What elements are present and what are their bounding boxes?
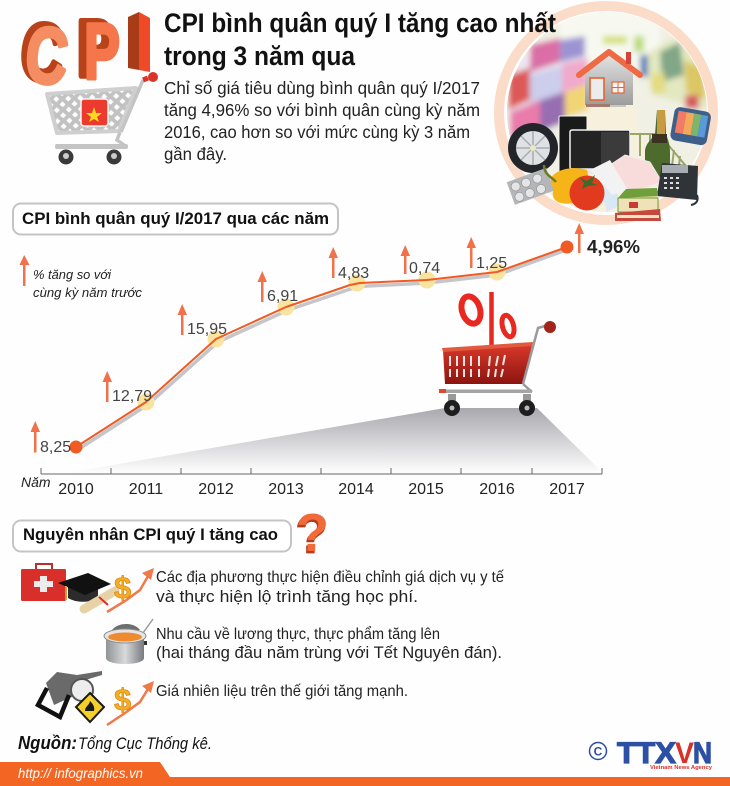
arrow: legend [20,255,30,286]
intro text [164,78,480,164]
wordmark [617,737,712,770]
line chart [70,240,574,454]
data labels: 0,74 [409,260,440,277]
data markers [138,264,506,410]
wordmark: N [693,737,712,770]
icon: graduation cap [58,573,111,602]
start point [70,440,82,454]
footer bar [0,762,730,786]
logo: CPI 3D letters [17,4,150,102]
legend text: cùng kỳ năm trước [33,285,142,300]
year labels: 2015 [408,481,444,498]
cause text [156,569,504,606]
tagline: Vietnam News Agency [650,765,713,771]
icon: champagne bottle [645,110,670,178]
icon: yellow pepper [551,168,588,204]
cause text [156,625,502,662]
wordmark: TTX [617,737,676,770]
intro text: gần đây. [164,144,227,164]
footer bar: http:// infographics.vn [18,765,143,781]
year labels: 2017 [549,481,585,498]
icon: books [615,188,661,221]
cause 1 [21,564,504,612]
title: CPI bình quân quý I tăng cao nhất [164,8,556,38]
letter P: P [77,4,113,93]
source: Tổng Cục Thống kê. [78,734,212,753]
basket [443,345,532,384]
heading: chart [13,204,338,234]
label: 2017 value: 4,96% [587,237,640,257]
year labels: 2013 [268,481,304,498]
letter I: I [139,69,140,71]
data line [76,247,567,447]
icon: dollar: $ [114,570,131,605]
title [164,8,556,71]
icon: fuel nozzle [38,671,102,717]
year labels: 2016 [479,481,515,498]
icon: shirts [590,155,662,212]
heading: causes: Nguyên nhân CPI quý I tăng cao [23,525,278,544]
logo: TTXVN [590,737,713,771]
icon: question mark: ? [295,505,328,565]
icon: monitor [570,130,630,174]
cause text: (hai tháng đầu năm trùng với Tết Nguyên đán). [156,644,502,662]
cause text: và thực hiện lộ trình tăng học phí. [156,588,418,606]
icon: telephone [657,163,698,205]
icon: tomato [544,165,604,210]
photo ring [499,6,713,220]
intro text: tăng 4,96% so với bình quân cùng kỳ năm [164,100,480,120]
icon: diploma [84,591,115,609]
wheels [444,394,535,416]
icon: cart handle behind goods [630,134,686,166]
letter C: C [21,9,72,102]
icon: computer tower [559,116,587,176]
icon: growth arrow [107,568,154,612]
cause text: Nhu cầu về lương thực, thực phẩm tăng lên [156,625,440,643]
icon: shopping illustration circle [499,5,715,221]
increase arrows [30,223,584,452]
area: grey shadow under chart [60,408,602,474]
data labels: 15,95 [187,321,227,338]
data labels [40,255,507,456]
data labels: 1,25 [476,255,507,272]
icon: hazard sign [76,693,104,722]
cause 3 [38,671,408,725]
icon: gauge [71,679,93,701]
source: Nguồn: [18,733,77,753]
icon: first aid kit [21,564,66,601]
heading: chart: CPI bình quân quý I/2017 qua các năm [22,209,329,228]
icon: cooking pot [104,619,153,664]
icon: silver shopping cart with flag [47,72,158,164]
year axis [21,468,602,498]
cause 2 [104,619,502,664]
heading: causes [13,520,291,552]
cause text: Giá nhiên liệu trên thế giới tăng mạnh. [156,683,408,700]
letter C: C [17,6,68,99]
letter P: P [84,7,120,96]
data labels: 4,83 [338,265,369,282]
icon: tire [508,123,558,173]
year labels: 2012 [198,481,234,498]
icon: blister pills [507,168,554,205]
source [18,733,212,753]
data labels: 8,25 [40,439,71,456]
icon: red cart with percent sign [439,292,556,416]
year labels: 2014 [338,481,374,498]
end point [560,240,574,254]
axis title: Năm [21,474,51,490]
legend text: % tăng so với [33,267,112,282]
legend text [33,267,142,300]
icon: Vietnam flag [81,99,108,126]
blurred supermarket photo [507,12,707,212]
handle and frame [523,326,545,392]
intro text: Chỉ số giá tiêu dùng bình quân quý I/2017 [164,78,480,98]
data labels: 6,91 [267,288,298,305]
line shadow [78,250,566,450]
percent sign [458,292,516,345]
data labels: 12,79 [112,388,152,405]
year labels [58,481,585,498]
icon: house [579,52,640,107]
intro text: 2016, cao hơn so với mức cùng kỳ 3 năm [164,122,470,142]
year labels: 2010 [58,481,94,498]
year labels: 2011 [129,481,163,498]
cause text: Các địa phương thực hiện điều chỉnh giá dịch vụ y tế [156,569,504,586]
legend [20,255,142,300]
icon: television [669,106,712,146]
title: trong 3 năm qua [164,41,356,71]
icon: question mark: ? [296,503,329,563]
icon: growth arrow [107,681,154,725]
copyright mark: C [594,744,603,758]
wordmark: V [675,737,694,770]
icon: dollar: $ [114,682,131,717]
